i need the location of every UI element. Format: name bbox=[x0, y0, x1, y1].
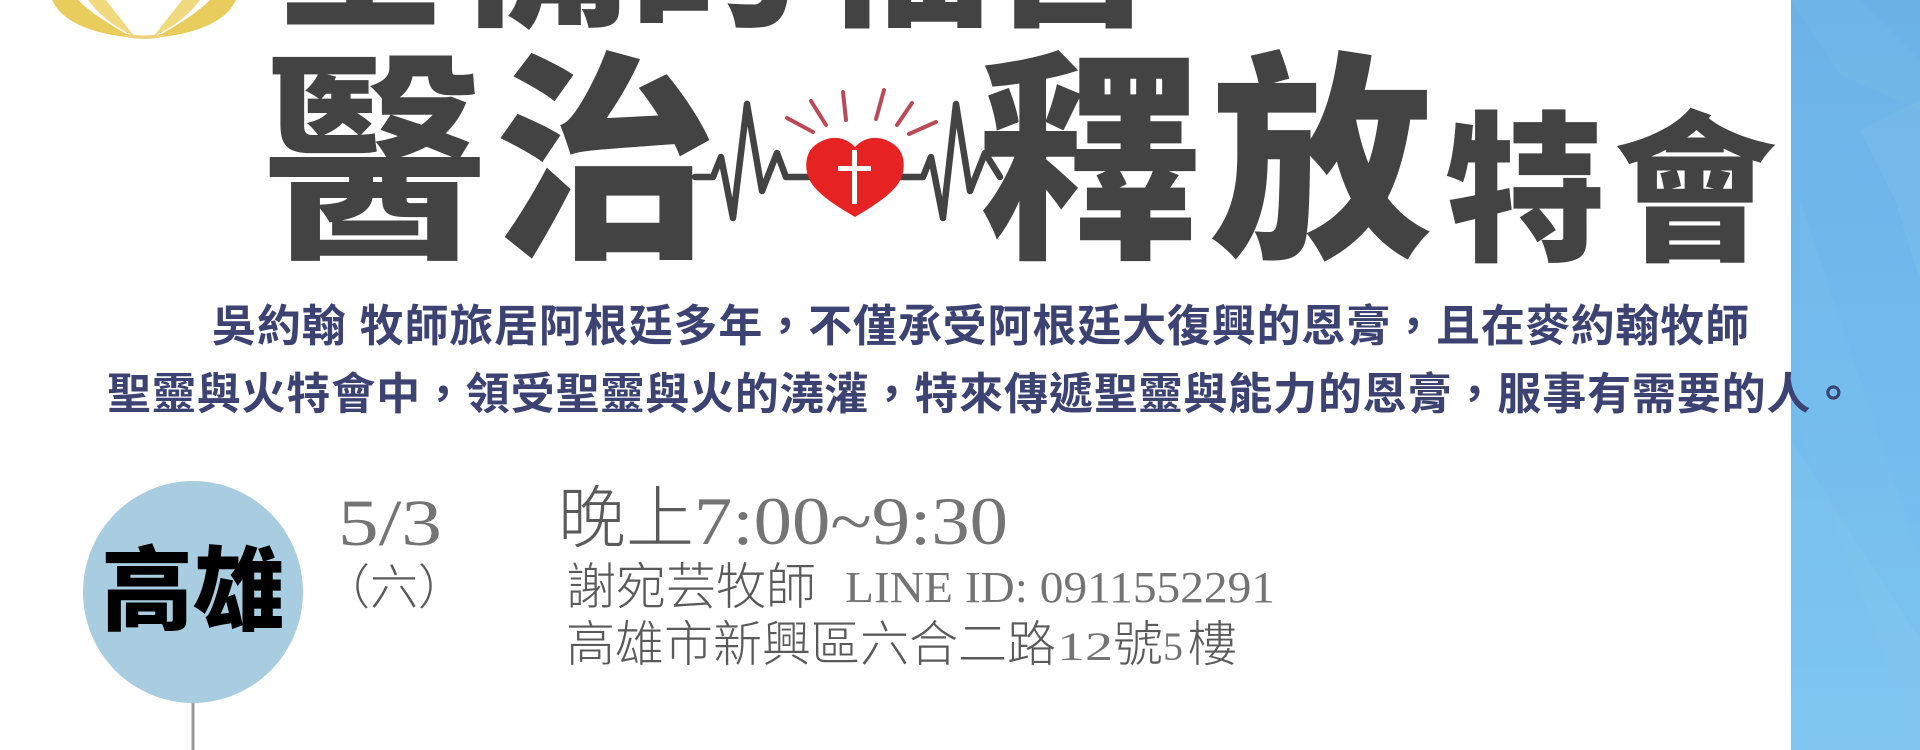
time: 晚上 bbox=[558, 481, 694, 557]
date bbox=[322, 487, 466, 615]
title: healing and deliverance: 放 bbox=[1210, 40, 1432, 288]
contact bbox=[566, 559, 1275, 615]
icon: heartbeat line with heart and cross bbox=[695, 90, 1000, 218]
text block: introduction: 聖靈與火特會中，領受聖靈與火的澆灌，特來傳遞聖靈與能力的恩膏，服事有需要的人。 bbox=[107, 370, 1856, 419]
address: 12 bbox=[1057, 624, 1113, 669]
date: 5/3 bbox=[338, 487, 442, 560]
badge: Kaohsiung bbox=[83, 481, 303, 703]
date: （六） bbox=[322, 562, 466, 615]
title: full gospel line bbox=[274, 0, 1158, 49]
time: 7:00~9:30 bbox=[694, 483, 1008, 559]
title: special meeting: 會 bbox=[1614, 102, 1776, 283]
address: 5 bbox=[1163, 624, 1183, 669]
badge: Kaohsiung: 高雄 bbox=[101, 541, 285, 643]
text block: introduction: 吳約翰 牧師旅居阿根廷多年，不僅承受阿根廷大復興的恩膏，且在麥約翰牧師 bbox=[212, 302, 1750, 351]
icon: gold wreath bbox=[52, 0, 236, 39]
contact: LINE ID: 0911552291 bbox=[845, 563, 1275, 612]
title: healing and deliverance bbox=[264, 40, 1432, 288]
title: special meeting bbox=[1444, 102, 1776, 283]
title: healing and deliverance: 釋 bbox=[979, 40, 1201, 288]
address: 樓 bbox=[1188, 618, 1237, 672]
title: healing and deliverance: 治 bbox=[494, 40, 716, 288]
address: 號 bbox=[1113, 618, 1163, 672]
title: healing and deliverance: 醫 bbox=[264, 40, 486, 288]
time bbox=[558, 481, 1008, 559]
panel: blue side band bbox=[1791, 0, 1920, 750]
text block: introduction bbox=[107, 302, 1856, 419]
title: special meeting: 特 bbox=[1444, 102, 1606, 283]
connector line below circle bbox=[192, 700, 194, 750]
contact: 謝宛芸牧師 bbox=[566, 559, 816, 615]
address: 高雄市新興區六合二路 bbox=[566, 618, 1056, 672]
